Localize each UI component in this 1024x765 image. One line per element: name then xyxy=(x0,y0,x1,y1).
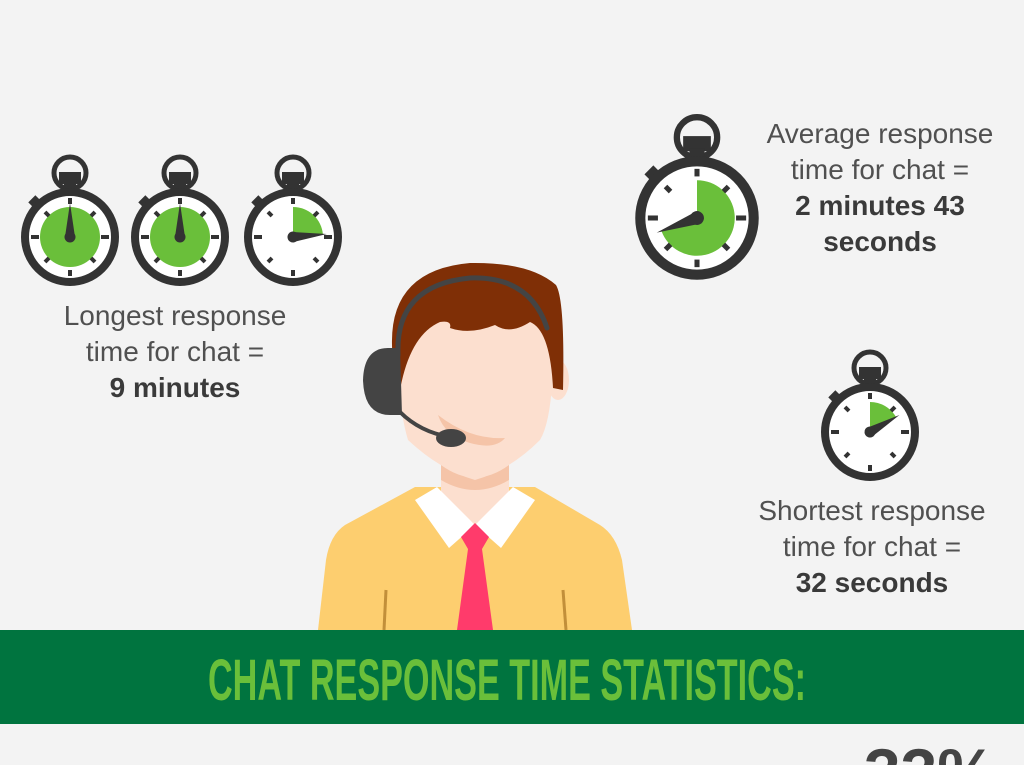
text: average response: Average response xyxy=(767,118,993,149)
stopwatch: longest 2 xyxy=(135,157,225,282)
text: longest response: time for chat = xyxy=(86,336,264,367)
face xyxy=(398,285,553,480)
text: longest response xyxy=(64,300,286,403)
text: average response: time for chat = xyxy=(791,154,969,185)
text: shortest response: time for chat = xyxy=(783,531,961,562)
stopwatch: longest 3 xyxy=(248,157,338,282)
text: average response: seconds xyxy=(823,226,937,257)
tie xyxy=(457,523,493,630)
text: longest response: Longest response xyxy=(64,300,286,331)
headset xyxy=(398,278,547,355)
stopwatch: average xyxy=(640,117,754,275)
text: shortest response: Shortest response xyxy=(758,495,986,526)
stopwatch: longest 1 xyxy=(25,157,115,282)
title band xyxy=(0,630,1024,724)
stopwatch: shortest xyxy=(825,352,915,477)
neck xyxy=(441,445,509,525)
ear xyxy=(547,360,569,400)
text: shortest response: 32 seconds xyxy=(796,567,948,598)
hair xyxy=(392,263,563,390)
illustration: support agent xyxy=(318,263,632,630)
text: average response: 2 minutes 43 xyxy=(795,190,965,221)
text: shortest response xyxy=(758,495,986,598)
shirt xyxy=(318,487,632,630)
smile xyxy=(438,415,505,446)
collar xyxy=(415,487,475,548)
text: average response xyxy=(767,118,993,257)
text: longest response: 9 minutes xyxy=(110,372,240,403)
